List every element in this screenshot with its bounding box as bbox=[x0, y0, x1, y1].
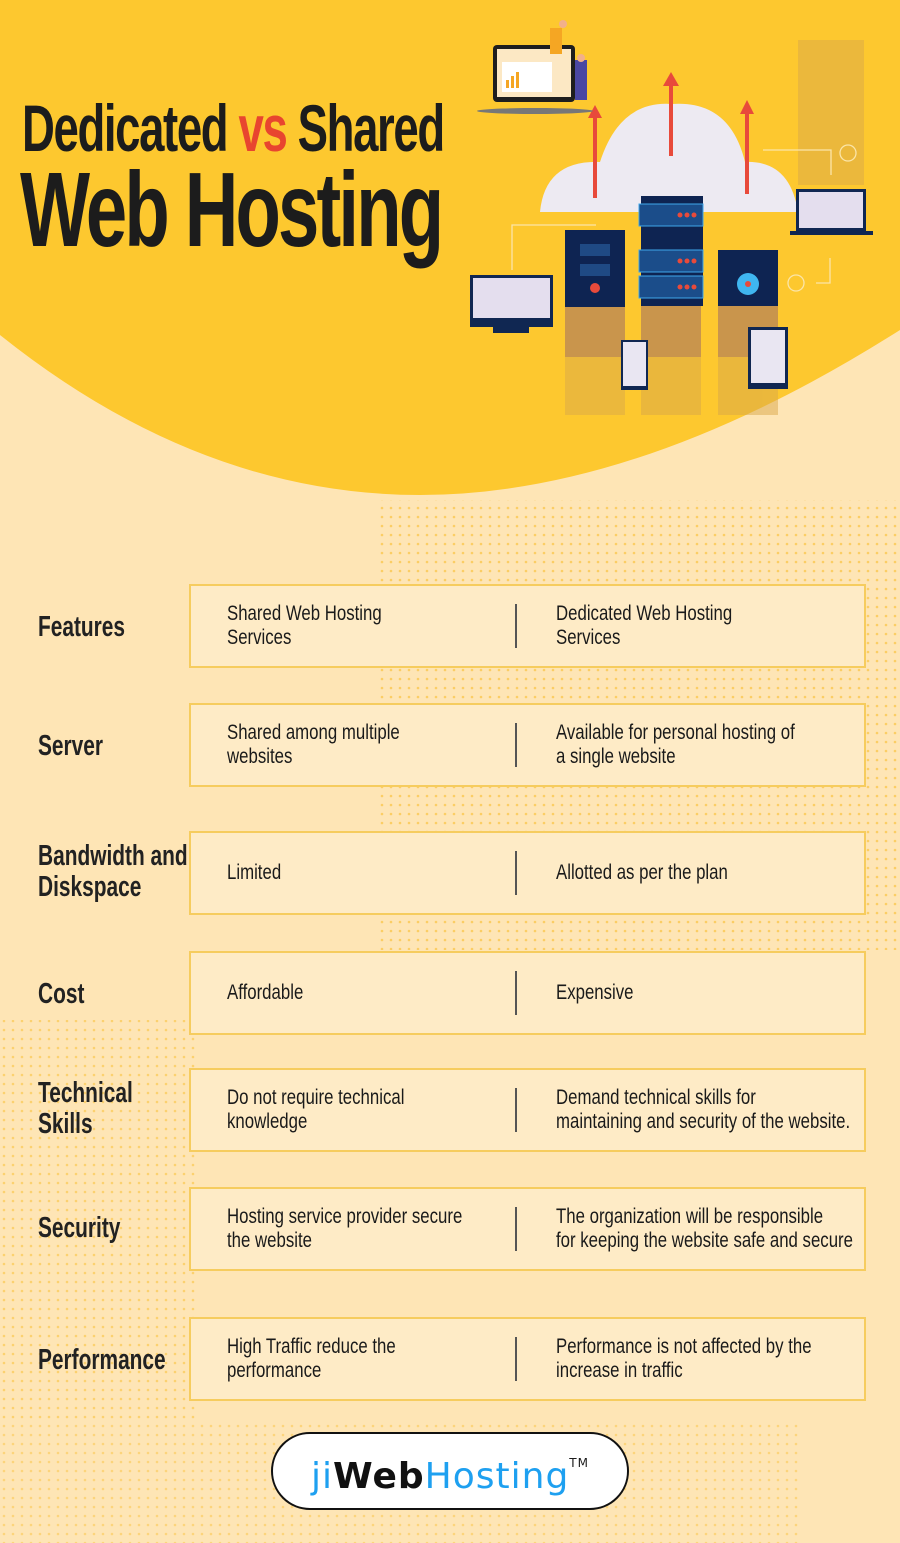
logo bbox=[271, 1432, 629, 1510]
row: features bbox=[189, 584, 866, 668]
title: Web Hosting bbox=[20, 151, 441, 269]
row: cost: Expensive bbox=[556, 981, 634, 1004]
row: features: Services bbox=[556, 626, 620, 649]
row: server bbox=[189, 703, 866, 787]
row: security: the website bbox=[227, 1229, 312, 1252]
row: technical skills bbox=[189, 1068, 866, 1152]
row: performance: High Traffic reduce the bbox=[227, 1335, 396, 1358]
illustration: cloud hosting servers and devices bbox=[470, 20, 873, 415]
row: cost bbox=[189, 951, 866, 1035]
text: Security bbox=[38, 1212, 120, 1244]
row: technical skills: knowledge bbox=[227, 1110, 307, 1133]
row: features: Shared Web Hosting bbox=[227, 602, 382, 625]
row: server: websites bbox=[227, 745, 292, 768]
row: security bbox=[189, 1187, 866, 1271]
row: bandwidth bbox=[189, 831, 866, 915]
row: security: for keeping the website safe and secure bbox=[556, 1229, 853, 1252]
row: server: a single website bbox=[556, 745, 676, 768]
text: Cost bbox=[38, 978, 84, 1010]
row: features: Dedicated Web Hosting bbox=[556, 602, 732, 625]
title bbox=[20, 91, 444, 269]
text: Technical bbox=[38, 1077, 133, 1109]
text: Server bbox=[38, 730, 103, 762]
row: performance bbox=[189, 1317, 866, 1401]
title: Dedicated vs Shared bbox=[22, 91, 444, 165]
row: bandwidth: Allotted as per the plan bbox=[556, 861, 728, 884]
logo: jiWebHostingTM bbox=[311, 1456, 589, 1497]
row: performance: increase in traffic bbox=[556, 1359, 683, 1382]
row: server: Shared among multiple bbox=[227, 721, 400, 744]
row: technical skills: Do not require technical bbox=[227, 1086, 404, 1109]
row: server: Available for personal hosting of bbox=[556, 721, 795, 744]
row: performance: Performance is not affected by the bbox=[556, 1335, 812, 1358]
text: Bandwidth and bbox=[38, 840, 188, 872]
row: features: Services bbox=[227, 626, 291, 649]
text: Diskspace bbox=[38, 871, 141, 903]
row labels: Features bbox=[38, 611, 125, 643]
row: bandwidth: Limited bbox=[227, 861, 281, 884]
text: Skills bbox=[38, 1108, 93, 1140]
row: technical skills: Demand technical skills for bbox=[556, 1086, 756, 1109]
row: security: Hosting service provider secure bbox=[227, 1205, 462, 1228]
row: cost: Affordable bbox=[227, 981, 303, 1004]
row: performance: performance bbox=[227, 1359, 321, 1382]
row: security: The organization will be responsible bbox=[556, 1205, 823, 1228]
text: Performance bbox=[38, 1344, 166, 1376]
row: technical skills: maintaining and security of the website. bbox=[556, 1110, 850, 1133]
